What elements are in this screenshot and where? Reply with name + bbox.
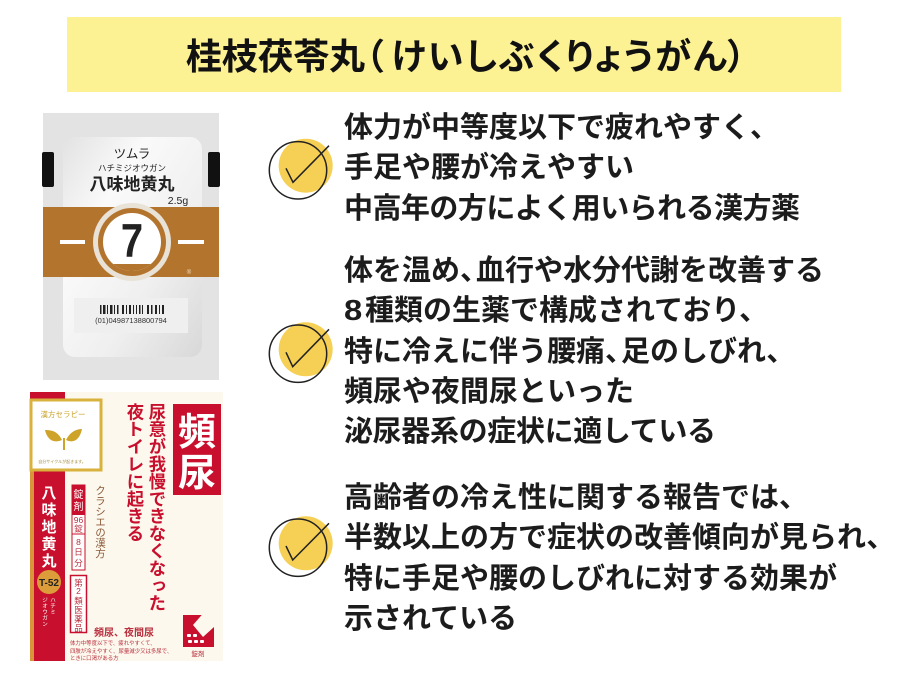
check icon 3 [269,516,333,576]
text block 3: 高齢者の冷え性に関する報告では、 [344,481,808,514]
second class medicine label: 医 [74,605,83,615]
second class medicine label [70,576,86,633]
vertical headline: 夜トイレに起きる [125,403,145,542]
sachet labels: ハチミジオウガン [98,163,166,173]
tablet info boxes: 96 [74,515,83,525]
icon: tablet pack [183,615,214,658]
text block 2: 8 [344,294,362,327]
red label: frequent urination: 尿 [178,453,216,495]
text block 1: 中高年の方によく用いられる漢方薬 [344,192,800,225]
text block 2 [344,254,824,448]
logo panel: 漢方セラピー [40,409,86,419]
tablet info boxes: 分 [74,558,83,568]
vertical headline [125,403,167,612]
side tabs [42,152,220,187]
second class medicine label: 薬 [74,614,83,624]
red label: frequent urination: 頻 [178,412,216,454]
reading label: ン [42,622,48,628]
brown band with number 7 [43,203,219,281]
text block 1: 手足や腰が冷えやすい [344,150,634,184]
text block 3: 半数以上の方で症状の改善傾向が見られ、 [344,520,895,554]
product image: Tsumura sachet [42,113,220,380]
reading label: ウ [42,608,48,616]
symptoms text: ときに口渇がある方 [70,654,119,662]
symptoms text [70,626,172,662]
vertical product name: 八 [41,485,57,502]
vertical headline: 尿意が我慢できなくなった [147,403,167,612]
text block 2: 特に冷えに伴う腰痛、足のしびれ、 [344,335,795,368]
title text: ） [726,36,762,77]
reading label: ミ [50,610,56,616]
icon: leaf sprout [45,429,82,450]
reading label: オ [42,603,48,610]
tablet info boxes: 錠 [74,524,83,534]
reading label: チ [50,603,56,610]
title text [186,36,762,77]
T-52 badge: T-52 [39,578,59,589]
tablet info boxes: 日 [74,547,83,557]
product image: Kracie box [30,392,223,662]
text block 1 [344,110,800,225]
logo panel [31,400,101,470]
symptoms text: 体力中等度以下で、疲れやすくて、 [70,639,156,647]
vertical product name: 地 [41,519,57,536]
reading label: ジ [42,598,48,604]
text block 2: 泌尿器系の症状に適している [344,415,716,448]
second class medicine label: 品 [74,623,83,633]
brown band with number 7: ® [187,269,192,276]
vertical product name: 丸 [41,553,57,570]
title text: 桂枝茯苓丸 [186,36,365,77]
check icon 2 [269,322,333,382]
reading label: ガ [42,614,48,622]
text block 3 [344,481,895,635]
tablet info boxes [72,485,85,570]
second class medicine label: 2 [76,586,81,596]
sachet labels: ツムラ [114,147,150,161]
symptoms text: 四肢が冷えやすく、尿量減少又は多尿で、 [70,647,172,655]
text block 3: 特に手足や腰のしびれに対する効果が [344,561,837,595]
text block 3: 示されている [344,603,517,635]
vertical product name: 黄 [41,535,57,553]
title text: けいしぶくりょうがん [391,36,727,77]
tablet info boxes: 剤 [74,501,84,513]
reading label: ハ [50,598,56,604]
sachet labels: 2.5g [168,195,188,207]
sachet labels [90,147,188,207]
title banner [67,17,841,92]
text block 2: 種類の生薬で構成されており、 [365,294,768,327]
check icon 1 [269,139,333,199]
vertical product name [41,485,57,570]
vertical product name: 味 [41,502,57,519]
tablet info boxes: 8 [76,537,81,547]
sachet labels: 八味地黄丸 [90,175,174,194]
text block 1: 体力が中等度以下で疲れやすく、 [344,110,779,144]
second class medicine label: 類 [74,596,83,606]
title text: （ [349,36,385,77]
text block 2: 頻尿や夜間尿といった [344,375,634,408]
barcode: (01)04987138800794 [95,316,167,325]
logo panel: 自分サイクルが起きます。 [38,458,86,464]
tablet info boxes: 錠 [74,489,84,501]
Kracie vertical label: クラシエの漢方 [94,485,106,559]
icon: tablet pack: 錠剤 [192,649,204,658]
T-52 badge [37,570,61,594]
symptoms text: 頻尿、夜間尿 [94,626,154,639]
second class medicine label: 第 [74,578,83,588]
reading label [42,598,56,628]
brown band with number 7: 7 [121,216,143,268]
barcode [74,298,188,333]
text block 2: 体を温め、血行や水分代謝を改善する [344,254,824,287]
red label: frequent urination [173,404,221,495]
